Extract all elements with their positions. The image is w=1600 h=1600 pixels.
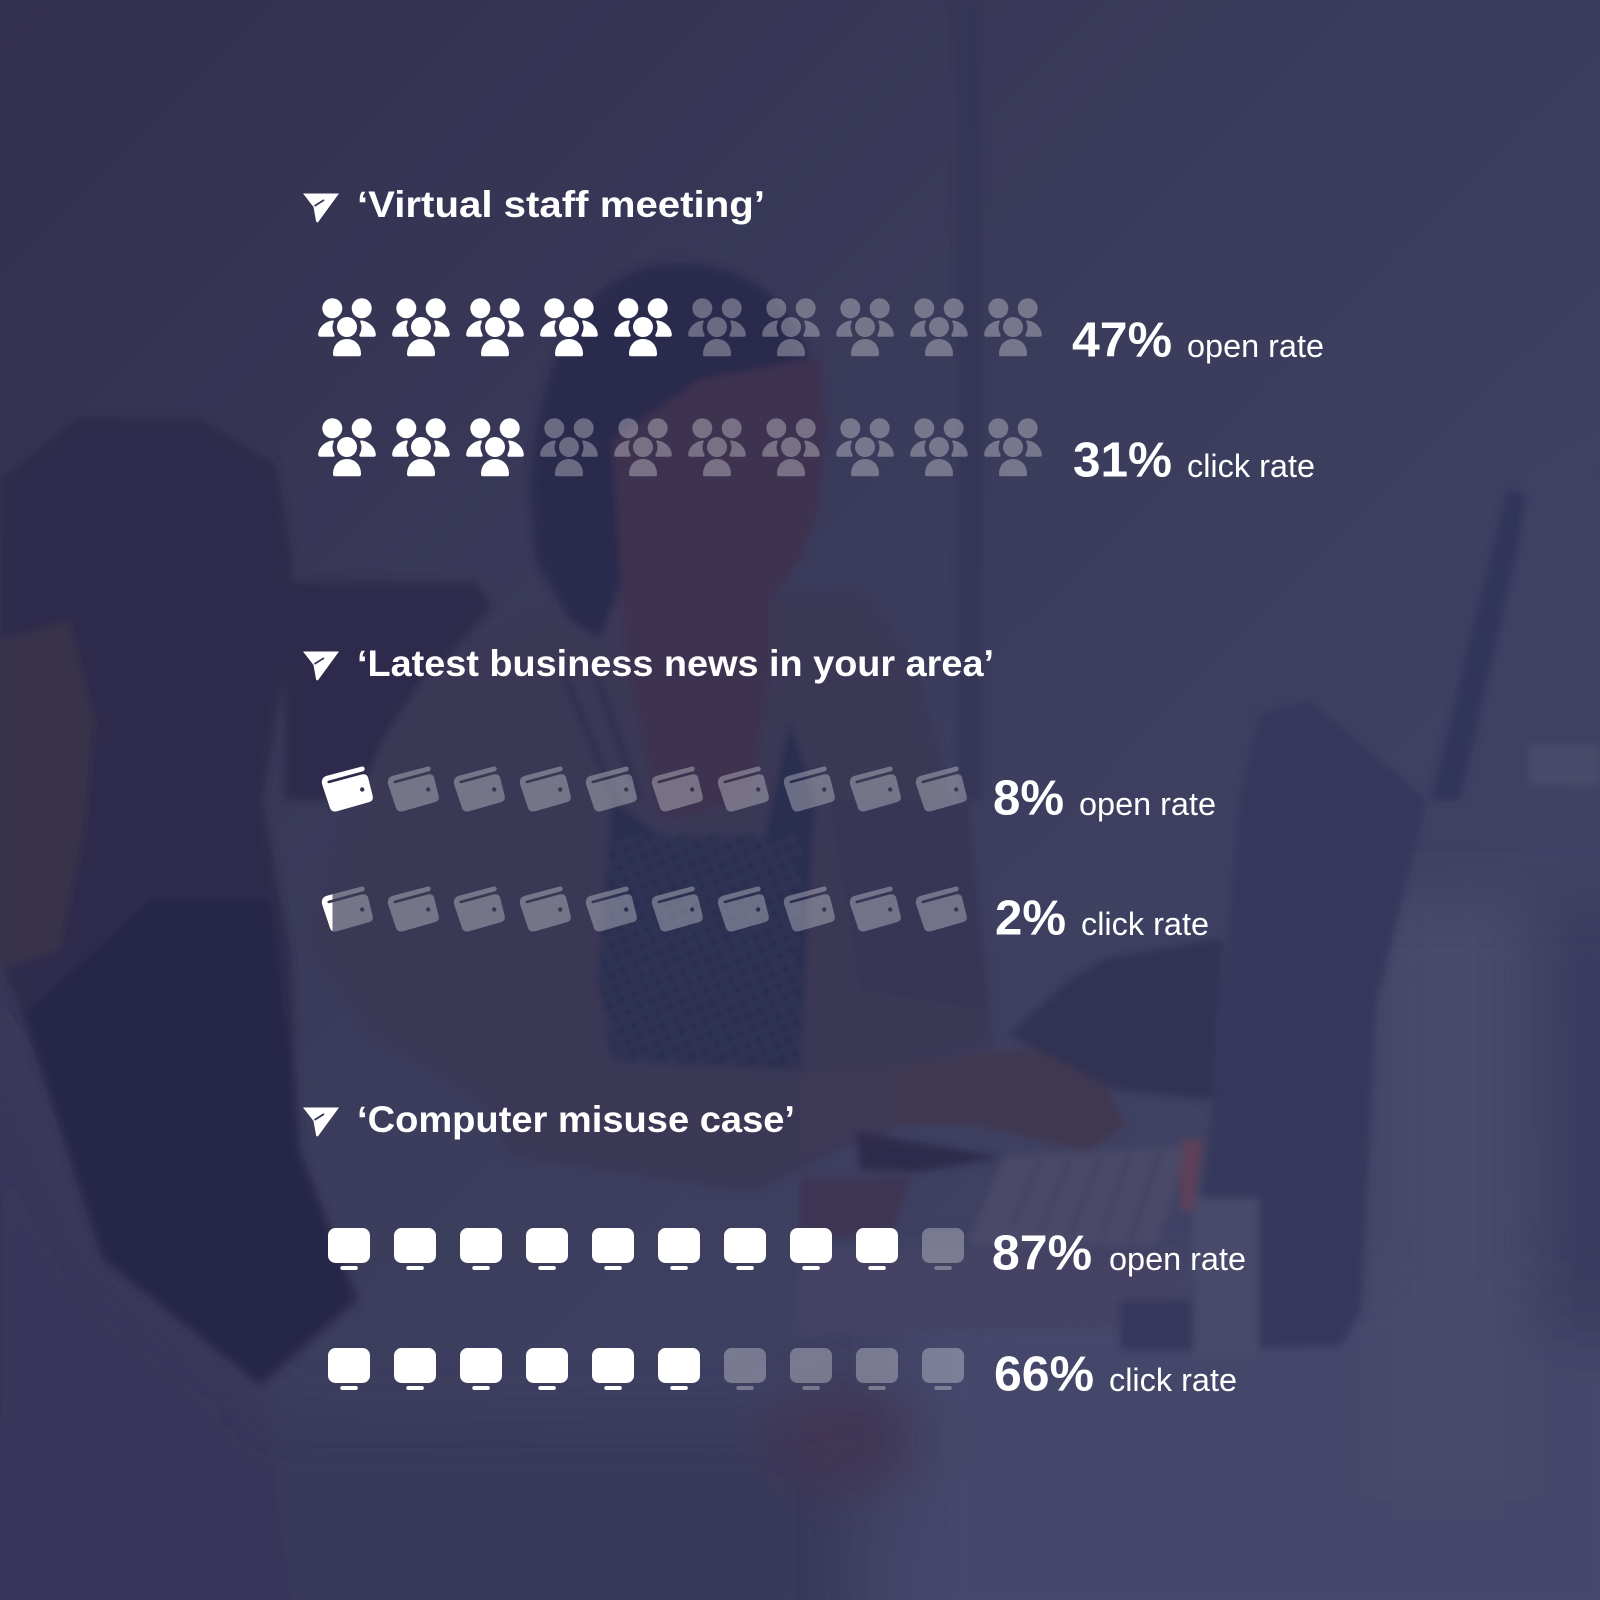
stat: 87% open rate xyxy=(992,1226,1246,1280)
stat: 66% click rate xyxy=(994,1348,1237,1402)
stat: 8% open rate xyxy=(993,772,1216,826)
stat: 31% click rate xyxy=(1073,434,1315,488)
stat: 31% click rate: 31% xyxy=(1073,434,1172,488)
pictogram row: 47% open rate xyxy=(318,298,1042,356)
stat: 8% open rate: open rate xyxy=(1079,786,1216,822)
icon: paper plane xyxy=(303,652,339,680)
stat: 31% click rate: click rate xyxy=(1187,448,1315,484)
pictogram row: 66% click rate xyxy=(328,1348,964,1390)
big monitor xyxy=(1183,700,1427,1351)
black sleeve xyxy=(1009,938,1223,1100)
heading: Latest business news in your area: ‘Latest business news in your area’ xyxy=(357,643,994,684)
blouse xyxy=(597,720,815,1070)
heading: Virtual staff meeting: ‘Virtual staff meeting’ xyxy=(357,184,765,225)
pictogram row: 2% click rate xyxy=(322,887,967,932)
icon: paper plane xyxy=(303,194,339,222)
stat: 47% open rate: 47% xyxy=(1072,314,1172,368)
left person hair and body xyxy=(0,418,360,1387)
stat: 87% open rate: open rate xyxy=(1109,1241,1246,1277)
panel: Computer misuse case xyxy=(303,1099,1246,1402)
icon: paper plane xyxy=(303,1108,339,1136)
stat: 47% open rate: open rate xyxy=(1187,328,1324,364)
right monitor stand xyxy=(1430,490,1530,800)
chair xyxy=(285,582,492,800)
stat: 2% click rate: 2% xyxy=(995,892,1066,946)
stat: 2% click rate: click rate xyxy=(1081,906,1209,942)
pictogram row: 8% open rate xyxy=(322,767,967,812)
sleeve and hand xyxy=(800,1065,897,1157)
woman face xyxy=(612,357,826,820)
pictogram row: 87% open rate xyxy=(328,1228,964,1270)
panel: Virtual staff meeting xyxy=(303,184,1324,488)
woman hair xyxy=(530,263,810,640)
stat: 47% open rate xyxy=(1072,314,1324,368)
lanyard xyxy=(562,660,640,810)
heading: Computer misuse case: ‘Computer misuse case’ xyxy=(357,1099,795,1140)
stat: 2% click rate xyxy=(995,892,1209,946)
pictogram row: 31% click rate xyxy=(318,418,1042,476)
woman cardigan xyxy=(306,590,994,1193)
desk xyxy=(800,1250,1180,1335)
stat: 66% click rate: 66% xyxy=(994,1348,1094,1402)
stat: 66% click rate: click rate xyxy=(1109,1362,1237,1398)
keyboard xyxy=(968,1147,1188,1244)
stat: 8% open rate: 8% xyxy=(993,772,1064,826)
panel: Latest business news in your area xyxy=(303,643,1216,946)
wall post xyxy=(958,0,982,800)
stat: 87% open rate: 87% xyxy=(992,1226,1092,1280)
